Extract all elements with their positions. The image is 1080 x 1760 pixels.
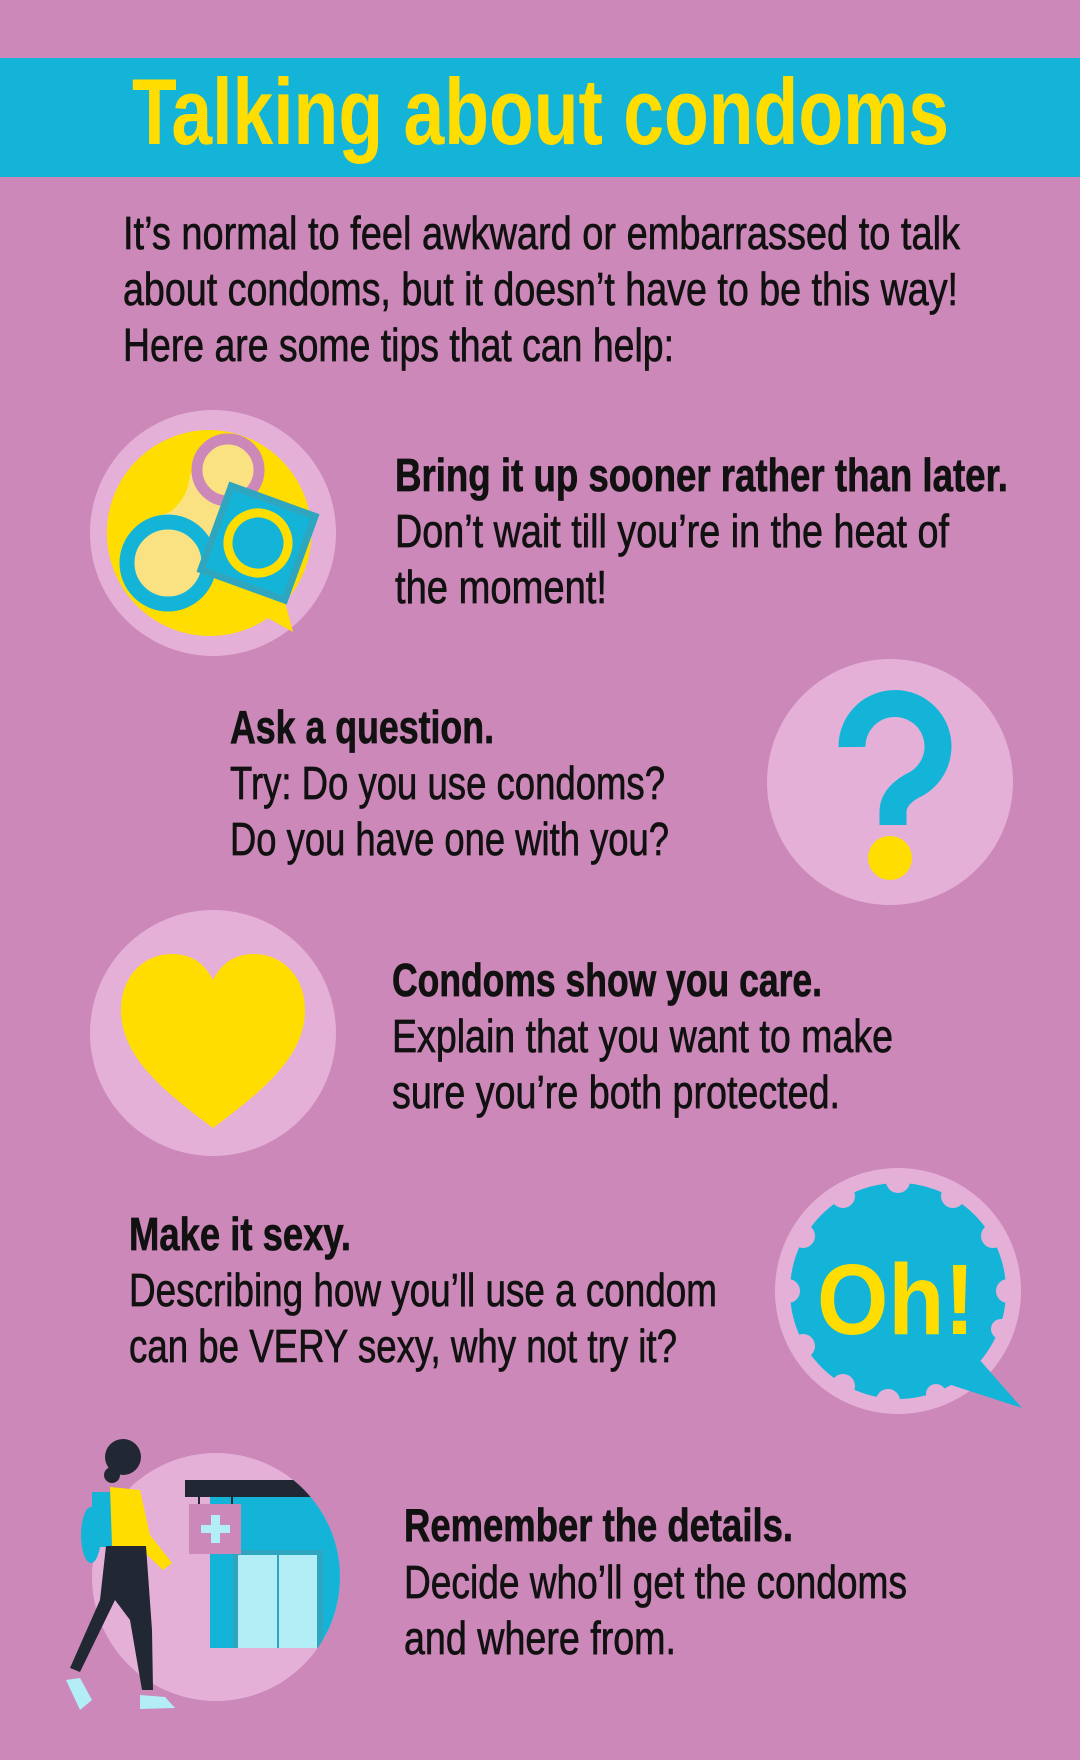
icon: heart bbox=[90, 910, 336, 1156]
tip 5 text: and where from. bbox=[404, 1612, 676, 1664]
intro text: Here are some tips that can help: bbox=[123, 319, 674, 371]
icon: speech bubble with condoms bbox=[90, 410, 336, 656]
icon: Oh! burst bbox=[775, 1168, 1022, 1414]
tip 3 text: Condoms show you care. bbox=[392, 954, 822, 1006]
tip 2 text: Do you have one with you? bbox=[230, 813, 669, 865]
tip 1 text bbox=[395, 449, 1008, 613]
tip 4 text: can be VERY sexy, why not try it? bbox=[129, 1320, 677, 1372]
tip 1 text: Don’t wait till you’re in the heat of bbox=[395, 505, 949, 557]
tip 4 text: Make it sexy. bbox=[129, 1208, 351, 1260]
icon: person walking to pharmacy bbox=[66, 1439, 350, 1710]
title banner bbox=[0, 58, 1080, 177]
intro text bbox=[123, 207, 961, 371]
tip 5 text: Remember the details. bbox=[404, 1499, 793, 1551]
tip 2 text bbox=[230, 701, 669, 865]
icon: question mark bbox=[767, 659, 1013, 905]
tip 3 text: Explain that you want to make bbox=[392, 1010, 893, 1062]
tip 4 text bbox=[129, 1208, 717, 1372]
tip 2 text: Try: Do you use condoms? bbox=[230, 757, 665, 809]
tip 1 text: the moment! bbox=[395, 561, 607, 613]
tip 4 text: Describing how you’ll use a condom bbox=[129, 1264, 717, 1316]
tip 3 text: sure you’re both protected. bbox=[392, 1066, 840, 1118]
icon: Oh! burst: Oh! bbox=[817, 1244, 975, 1356]
tip 3 text bbox=[392, 954, 893, 1118]
tip 5 text bbox=[404, 1499, 907, 1664]
tip 5 text: Decide who’ll get the condoms bbox=[404, 1556, 907, 1608]
tip 2 text: Ask a question. bbox=[230, 701, 494, 753]
